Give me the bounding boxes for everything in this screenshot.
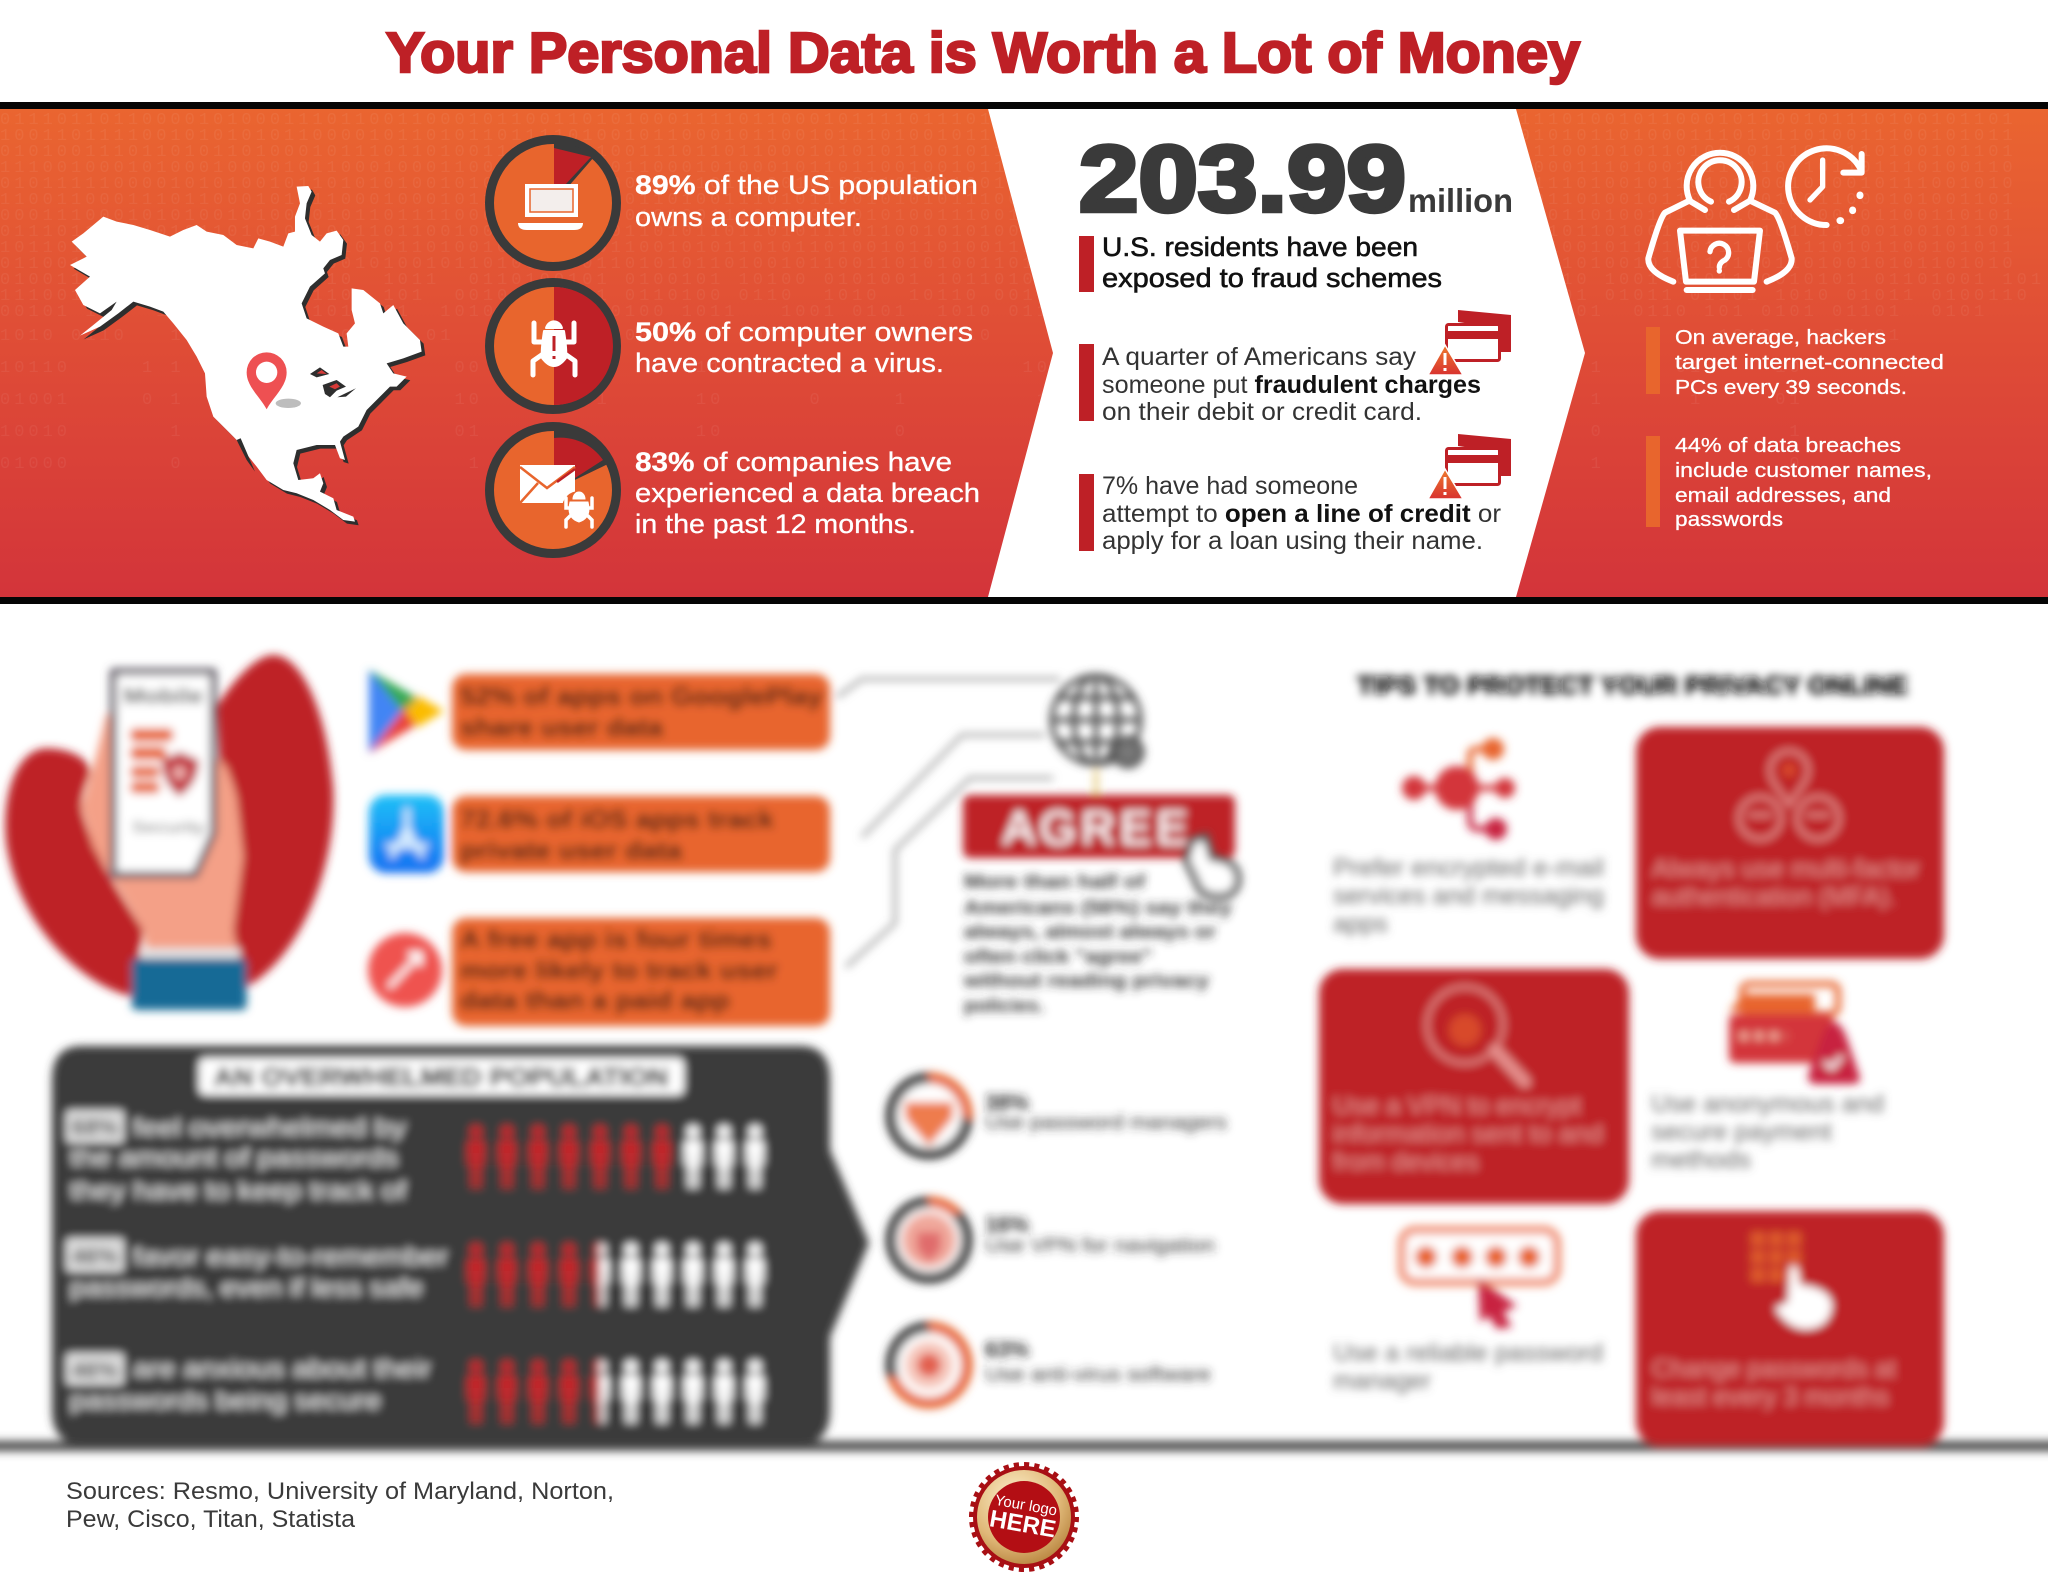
stat: password managers [891,1078,1227,1154]
blurred lower section [0,655,2048,1451]
row: anxious: passwords being secure [70,1387,381,1415]
tip: encrypted e-mail: apps [1333,910,1388,938]
tip: VPN: Use a VPN to encrypt [1333,1092,1581,1120]
text: agree without reading: Americans (56%) say they [964,898,1232,919]
callout: Google Play stat: share user data [460,712,664,742]
tip: change passwords: least every 3 months [1652,1383,1889,1411]
callout: free app stat: more likely to track user [460,955,778,985]
panel: top band: 1011010101010110111010011010110100101011010110010101101011010010110100111010011011001001011010010111001101011100101101001110100110101100101011 [0,239,2017,258]
icon: small bug [562,491,596,527]
row: easy-to-remember [66,1238,764,1306]
phone [113,672,213,875]
panel: top band: 0101001110110101101000101110110100111001101001110110110001010101100101101110010100101101011100110101001011011100101011010010111010110100101101 [0,143,2017,162]
icon: free app circle [368,933,442,1007]
big number [1079,126,1513,231]
icon: cards with warning 2 [1428,434,1511,499]
text: agree without reading: without reading privacy [963,971,1209,992]
panel: top band: 1100110001110110001010110001000101110100110001101001110101100101010111000110100100110011101001011011100100110110100101101001011011000101001101 [0,191,2017,210]
stat: 83% data breach: in the past 12 months. [635,509,916,539]
tip: password manager: Use a reliable password [1333,1339,1603,1367]
button: agree [963,795,1235,858]
phone: Security [132,820,205,837]
row: overwhelmed: the amount of passwords [70,1144,398,1172]
callout: Google Play stat: 52% of apps on GooglePlay [460,681,824,711]
tip: password manager: manager [1333,1367,1431,1395]
text: sources: Sources: Resmo, University of Maryland, Norton, [66,1478,614,1505]
title: Your Personal Data is Worth a Lot of Money [386,21,1580,85]
text: fraudulent charges [1079,343,1481,426]
tip: change passwords: Change passwords at [1652,1355,1896,1383]
stat: 89% computer ownership: owns a computer. [635,202,862,232]
logo badge: HERE [988,1505,1058,1543]
tip: VPN [1319,969,1629,1204]
tip: password manager [1333,1230,1603,1395]
tip: encrypted e-mail: services and messaging [1333,882,1604,910]
text: hackers every 39 seconds [1646,327,1944,399]
text: hackers every 39 seconds: On average, hackers [1675,327,1886,349]
text: 44% of data breaches: email addresses, and [1675,485,1891,507]
callout: iOS stat: private user data [460,835,683,865]
text: fraudulent charges: A quarter of Americans say [1102,343,1417,371]
row: easy-to-remember: passwords, even if less safe [70,1274,423,1302]
icon: keypad [1751,1232,1801,1282]
top black rule [0,102,2048,109]
connector lines [837,679,1096,967]
stat: VPN [891,1202,1215,1278]
icon: hacker at laptop [1648,153,1792,290]
text: sources: Pew, Cisco, Titan, Statista [66,1506,356,1533]
text: fraudulent charges: someone put fraudulent charges [1102,371,1481,399]
stat: anti-virus: Use anti-virus software [985,1364,1211,1386]
illustration: hand holding phone [5,655,333,1010]
callout: free app stat [452,918,830,1026]
text: sources [66,1478,614,1533]
row: overwhelmed [66,1110,764,1205]
panel: top band: 0111011100101011010100100110110010001001011011010110110101110110010101001001001110100111001010110100101110100101101001110100101011100100101101 [0,223,2017,242]
icon: envelope [520,465,575,503]
panel: top band: 01001 0 1 1 0 10 1 10 0 1 1 01 0 10 0 1 1 01 [0,391,1804,410]
tip: anonymous payment: Use anonymous and [1651,1090,1884,1118]
logo badge [973,1466,1075,1568]
text: 83%: 83% of companies have [635,447,952,477]
stat: password managers: Use password managers [985,1112,1227,1134]
stat: VPN: Use VPN for navigation [985,1235,1215,1257]
text: 44% of data breaches: 44% of data breaches [1675,435,1901,457]
text: 44% of data breaches [1646,435,1932,531]
icon: App Store [369,795,444,873]
icon: Google Play [369,670,444,753]
big number: million [1408,182,1513,219]
logo badge: Your logo [994,1492,1058,1520]
tip: multi-factor authentication [1636,727,1944,959]
callout: Google Play stat [452,674,830,750]
icon: location pin [247,352,301,409]
panel: white centre chevron [988,109,1585,597]
panel: top band: 10110 1 1 0 1 00 10 011 1 1 10 11 0 1 110 1 1 01 10 [0,359,1804,378]
text: agree without reading: often click "agree" [964,947,1152,968]
icon: globe [1052,676,1142,766]
tip: encrypted e-mail: Prefer encrypted e-mail [1333,854,1604,882]
icon: bug [533,321,575,375]
text: hackers every 39 seconds: PCs every 39 seconds. [1675,377,1907,399]
stat: 50% virus: have contracted a virus. [635,348,944,378]
panel: top band: 0111011011000010100011101100110001011001101010001111011000101111011101010011011110010101010110001011010110111101001011000101100101110100101101 [0,111,2017,130]
bottom black rule [0,597,2048,604]
text: 89%: 89% of the US population [635,170,978,200]
tip: anonymous payment: secure payment [1651,1118,1832,1146]
panel: top band [0,109,2048,597]
panel: top band: 1110010101100 1001010 110 101 0010110 101 0110100 0110 1010 10110 001011 0100 0110100 10101 010011 0110 1001 01011 01101 1010 01011 0100110 [0,287,2031,306]
icon: card and lock [1729,984,1860,1084]
row: overwhelmed: feel overwhelmed by [133,1114,407,1142]
text: 44% of data breaches: passwords [1675,509,1783,531]
text: fraudulent charges: on their debit or credit card. [1102,398,1422,426]
bottom grey rule [0,1441,2048,1451]
icon: network [1402,738,1515,840]
tip: anonymous payment [1651,984,1884,1174]
text: hackers every 39 seconds: target internet-connected [1675,352,1944,374]
text: agree without reading: always, almost always or [964,922,1217,943]
icon: clock [1788,148,1862,225]
stat: password managers: 38% [985,1090,1029,1115]
text: line of credit: 7% have had someone [1102,472,1358,500]
text: 50%: 50% of computer owners [635,317,973,347]
panel: top band: 01000 0 1 0 1 1 0 1 0 [0,455,1804,474]
big number: 203.99 [1079,126,1406,231]
text: U.S. residents: U.S. residents have been [1102,232,1418,262]
stat: anti-virus [891,1327,1211,1403]
text: U.S. residents: exposed to fraud schemes [1102,263,1442,293]
tip: multi-factor authentication: authentication (MFA). [1652,883,1896,911]
panel: an overwhelmed population [52,1046,869,1444]
tip: VPN: from devices [1333,1148,1479,1176]
text: agree without reading: More than half of [964,872,1146,893]
stat: 83% data breach [490,426,980,554]
panel: top band: 0110010111010010110101100101001011010011001101010110100101100110101001101011010010100111001010010110100101100110100101011010011010010101101010 [0,255,2017,274]
tip: encrypted e-mail [1333,738,1604,938]
panel: top band: 0101111100001010100101101010100101011100101000110101110010100110010100111010010110101110011010010110100101001110100101101011001010010111001010 [0,175,2017,194]
button: agree: AGREE [1003,801,1193,854]
callout: iOS stat: 72.6% of iOS apps track [460,804,775,834]
icon: password field [1402,1230,1557,1329]
text: line of credit: attempt to open a line of credit or [1102,500,1501,528]
tip: multi-factor authentication: Always use multi-factor [1652,855,1920,883]
stat: anti-virus: 63% [985,1337,1029,1362]
row: overwhelmed: they have to keep track of [70,1177,406,1205]
phone: Mobile [123,683,203,708]
text: agree without reading [963,872,1232,1017]
panel: top band: 1110010001010001000010110001000110001011010011000101000101101100100101110100110111001011011001011101001011010001110100101101100101101110100110 [0,159,2017,178]
row: easy-to-remember: 46% [72,1243,118,1269]
panel: top band: 1010 0110 101 0 10 01 101 0010 1011 1 0 10 0110 1011 1 0 1010 01 0 1010 01101 [0,327,1903,346]
row: anxious: are anxious about their [133,1355,431,1383]
text: line of credit [1079,472,1501,555]
panel: top band: 0100110101101011010100110 1011 0110100101 0100101 10100 0101001 1011010 01011010 010110 10100101 01101 0010110 1001 01011 0010101 01101001 101 [0,271,2045,290]
stat: 89% computer ownership [490,140,978,266]
heading: tips: TIPS TO PROTECT YOUR PRIVACY ONLINE [1357,672,1908,700]
row: easy-to-remember: favor easy-to-remember [133,1243,448,1271]
tip: VPN: information sent to and [1333,1120,1603,1148]
panel: top band: 0001110001010100101001010110111100011111001101010011101100100101001110011010110010101101101001011100101010011011010010110010110100101100110101 [0,207,2017,226]
map: North America [70,186,425,525]
icon: pointing hand [1775,1266,1832,1329]
icon: cards with warning 1 [1428,310,1511,375]
row: overwhelmed: 68% [72,1114,118,1140]
tip: anonymous payment: methods [1651,1146,1751,1174]
callout: iOS stat [452,796,830,872]
stat: 83% data breach: experienced a data breach [635,478,980,508]
text: agree without reading: policies. [964,996,1044,1017]
tip: change passwords [1636,1211,1944,1446]
icon: hand cursor [1186,836,1238,896]
row: anxious: 46% [72,1357,118,1383]
stat: VPN: 16% [985,1212,1029,1237]
text: 44% of data breaches: include customer names, [1675,460,1932,482]
callout: free app stat: A free app is four times [460,924,772,954]
text: U.S. residents [1079,232,1442,293]
panel: top band: 10010 1 0 01 10 0 0 1 1 0 1 [0,423,1804,442]
panel: top band: 00101 100 1010 0110 1011 01 1010 1001 10100 1011 1001 0101 1010 0110 1001 10101 010 1011 0110 101 01 0110 101 0101 01101 0101 [0,303,1988,322]
row: anxious [66,1353,764,1423]
stat: 50% virus [490,282,973,410]
callout: free app stat: data than a paid app [460,985,730,1015]
text: line of credit: apply for a loan using their name. [1102,527,1483,555]
panel heading: AN OVERWHELMED POPULATION [214,1062,668,1092]
panel: top band: 1001101111001010101011000010110101101111010010110001011001011101001011011001011101011001101001110110101100101010110100011101011010011100101011 [0,127,2017,146]
icon: laptop [518,184,583,230]
